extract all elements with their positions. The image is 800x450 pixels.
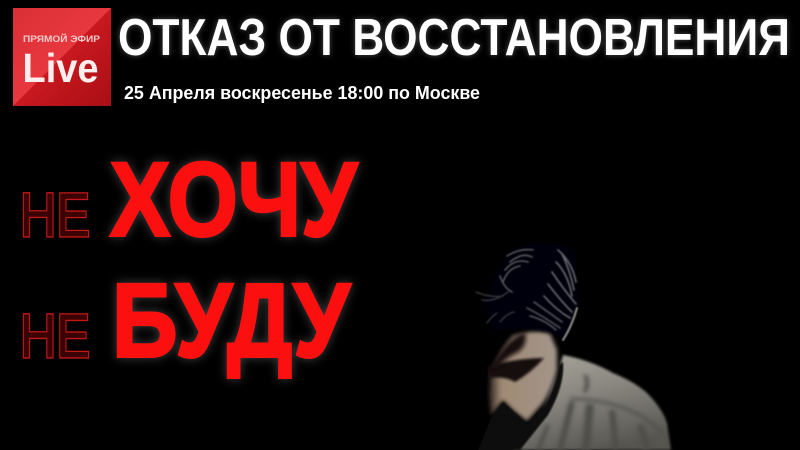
subtitle: date and time: 25 Апреля воскресенье 18:00 по Москве bbox=[124, 83, 480, 103]
brow and eye shadow bbox=[488, 358, 544, 382]
beard bbox=[478, 362, 563, 450]
headline line 2 bbox=[20, 262, 351, 380]
badge highlight bbox=[13, 8, 111, 106]
outlined word НЕ: НЕ bbox=[20, 302, 90, 370]
face bbox=[489, 331, 557, 421]
headline line 1 bbox=[20, 142, 358, 258]
hair bbox=[476, 242, 579, 343]
hair strands bbox=[476, 250, 577, 340]
forehead shadow bbox=[490, 332, 526, 368]
outlined word НЕ: НЕ bbox=[20, 181, 90, 249]
shirt folds bbox=[538, 375, 664, 450]
badge square bbox=[13, 8, 111, 106]
badge caption: ПРЯМОЙ ЭФИР bbox=[23, 33, 100, 44]
word БУДУ: БУДУ bbox=[112, 262, 351, 380]
hair mass bbox=[484, 242, 579, 343]
outlined word НЕ: НЕ bbox=[20, 181, 90, 249]
shadowed shoulder bbox=[330, 350, 500, 450]
word ХОЧУ: ХОЧУ bbox=[110, 142, 358, 258]
outlined word НЕ: НЕ bbox=[20, 302, 90, 370]
photo: man with lowered head bbox=[330, 242, 671, 450]
live badge bbox=[13, 8, 111, 106]
badge word Live: Live bbox=[22, 45, 98, 91]
shirt bbox=[513, 355, 671, 450]
